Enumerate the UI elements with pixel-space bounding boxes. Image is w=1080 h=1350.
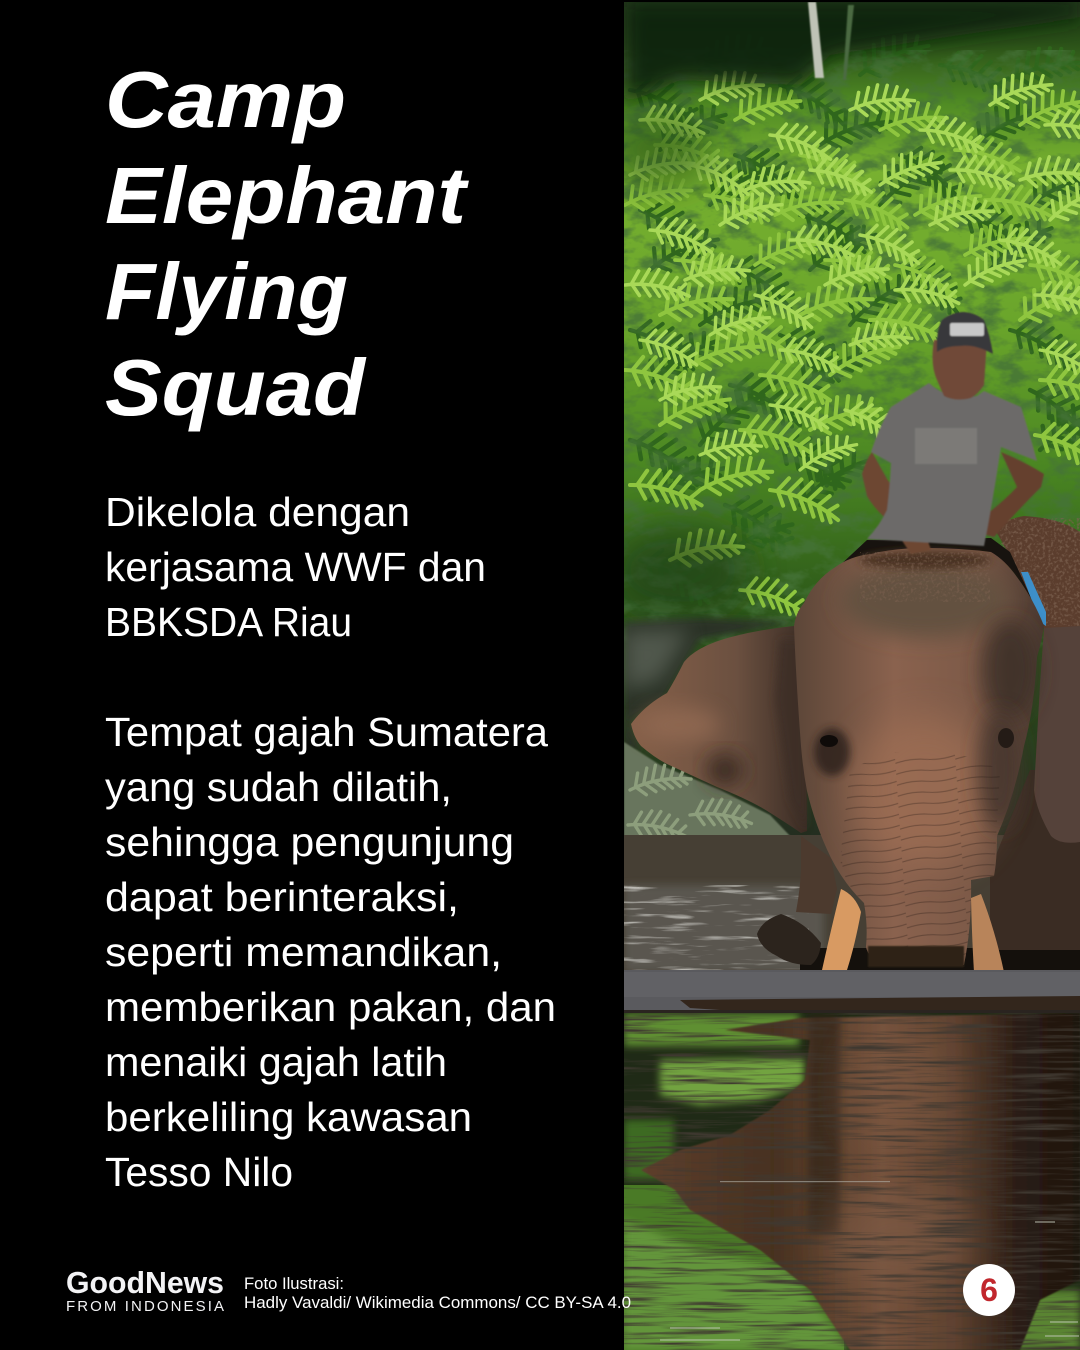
face xyxy=(933,340,987,400)
front leg xyxy=(796,880,830,914)
description text xyxy=(105,709,556,1195)
logo: GoodNews from Indonesia xyxy=(66,1265,224,1315)
intro text: BBKSDA Riau xyxy=(105,599,352,645)
description text: berkeliling kawasan xyxy=(105,1094,472,1140)
elephant body behind head xyxy=(990,770,1080,950)
right arm xyxy=(986,452,1044,538)
left tusk xyxy=(822,889,861,970)
mahout xyxy=(862,312,1044,554)
description text: Tempat gajah Sumatera xyxy=(105,709,548,755)
description text: seperti memandikan, xyxy=(105,929,502,975)
description text: sehingga pengunjung xyxy=(105,819,514,865)
grey t-shirt xyxy=(867,383,1037,546)
blue saddle stripe xyxy=(1021,572,1046,626)
description text: dapat berinteraksi, xyxy=(105,874,459,920)
description text: memberikan pakan, dan xyxy=(105,984,556,1030)
left black panel xyxy=(0,0,624,1350)
photo: mahout riding a Sumatran elephant in a river xyxy=(605,0,1080,1350)
left arm xyxy=(862,452,931,554)
intro text: kerjasama WWF dan xyxy=(105,544,486,590)
elephant head and trunk xyxy=(794,548,1044,967)
grey reflective band of water xyxy=(624,970,1080,1013)
grey bank foliage behind ear xyxy=(624,630,690,690)
logo: GoodNews from Indonesia: FROM INDONESIA xyxy=(66,1298,224,1315)
photo credit xyxy=(244,1274,631,1312)
title: Camp xyxy=(105,55,346,144)
description text: yang sudah dilatih, xyxy=(105,764,452,810)
dark saddle cloth xyxy=(843,538,1044,626)
page number badge: 6 xyxy=(980,1272,998,1308)
dark bank behind the ear xyxy=(624,618,800,750)
photo credit: Foto Ilustrasi: xyxy=(244,1274,344,1293)
logo: GoodNews from Indonesia: GoodNews xyxy=(66,1265,224,1300)
foot in water xyxy=(757,914,821,965)
intro text xyxy=(105,489,486,645)
cap xyxy=(937,312,993,354)
title xyxy=(105,55,470,432)
title: Elephant xyxy=(105,151,470,240)
river surface with rapids xyxy=(624,835,1080,972)
title: Squad xyxy=(105,343,367,432)
page number badge xyxy=(963,1264,1015,1316)
description text: Tesso Nilo xyxy=(105,1149,293,1195)
pale foliage at water edge xyxy=(624,742,792,844)
left ear xyxy=(631,626,807,833)
photo credit: Hadly Vavaldi/ Wikimedia Commons/ CC BY-SA 4.0 xyxy=(244,1293,631,1312)
elephant back mound xyxy=(994,516,1080,628)
reflected elephant xyxy=(641,1013,1080,1350)
title: Flying xyxy=(105,247,348,336)
reflected greenery xyxy=(624,1014,799,1046)
right ear xyxy=(1034,626,1080,843)
water reflection xyxy=(624,1013,1080,1350)
right tusk xyxy=(971,894,1004,972)
intro text: Dikelola dengan xyxy=(105,489,410,535)
fern foliage background xyxy=(605,0,1080,850)
description text: menaiki gajah latih xyxy=(105,1039,447,1085)
